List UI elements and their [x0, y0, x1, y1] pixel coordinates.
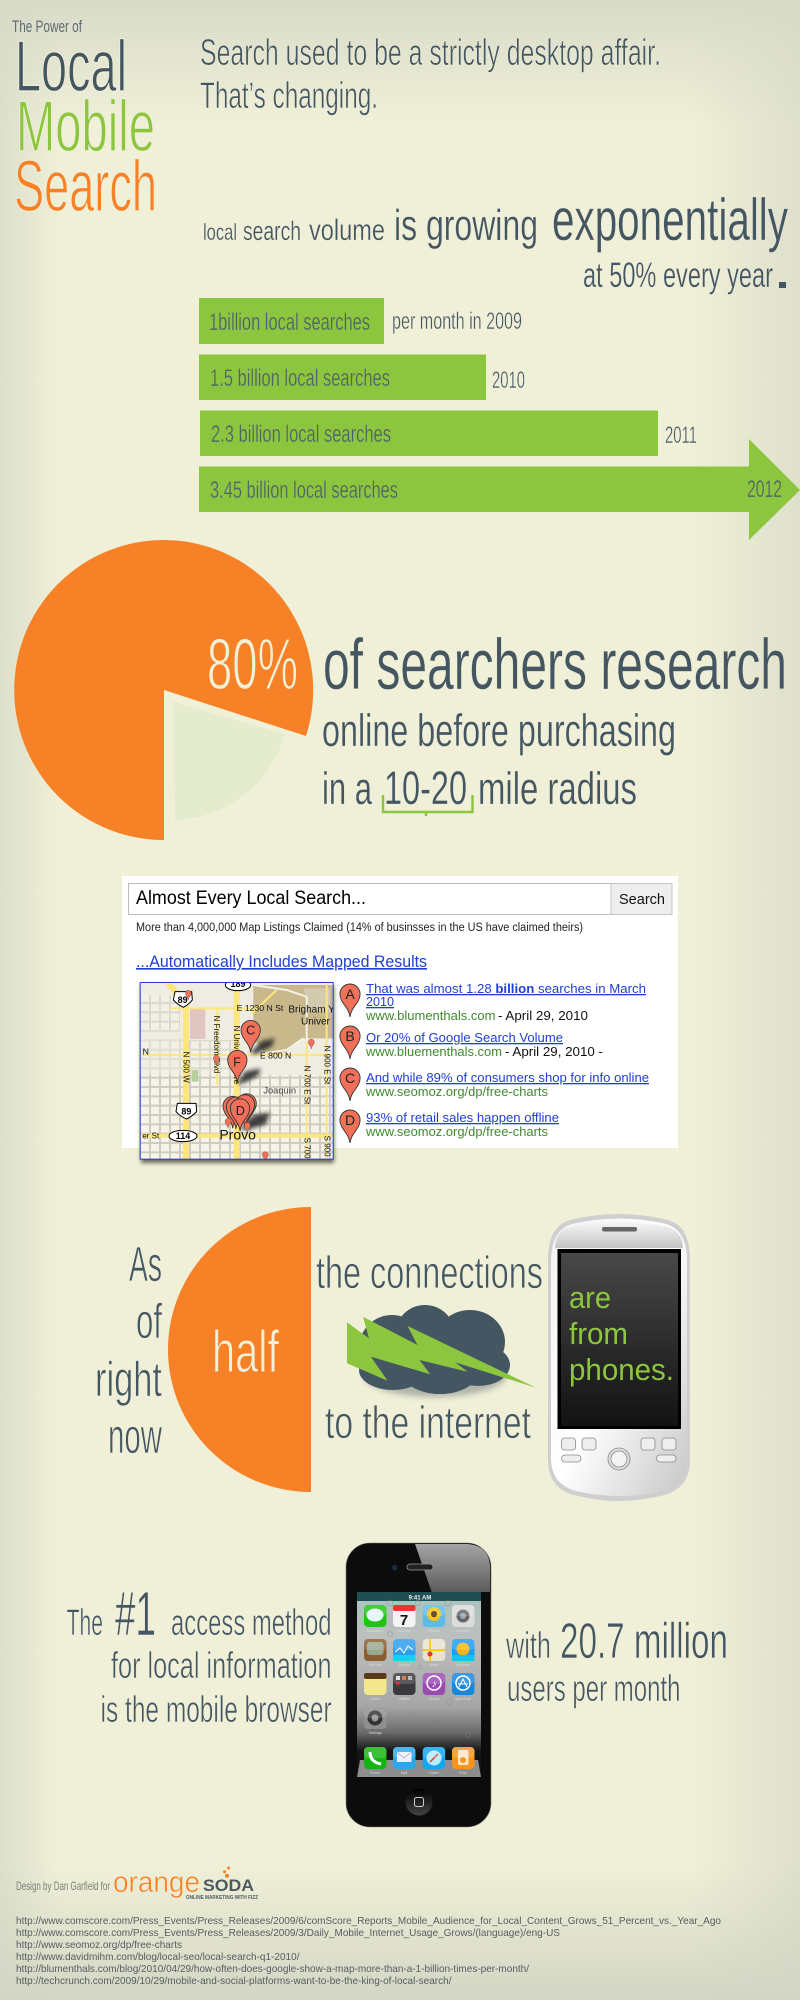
internet text: to the internet [325, 1397, 531, 1448]
arrow bar 2012 [199, 439, 800, 540]
credit and orangesoda logo [16, 1866, 258, 1901]
map road labels: N Freedom Blvd [212, 1016, 221, 1073]
map road labels: S 900 [323, 1136, 332, 1157]
title kicker: The Power of [12, 17, 82, 36]
app labels: Maps [430, 1663, 439, 1667]
result B: - April 29, 2010 - [505, 1044, 603, 1059]
bar 2009 [199, 298, 522, 344]
phone screen [558, 1249, 681, 1429]
half circle chart: half [212, 1319, 279, 1385]
title word: Search: Search [14, 147, 157, 227]
result B: Or 20% of Google Search Volume [366, 1030, 563, 1045]
map road labels: Provo [219, 1126, 256, 1142]
map markers [185, 990, 314, 1162]
source list: http://www.seomoz.org/dp/free-charts [16, 1939, 182, 1951]
phone screen text: phones. [569, 1352, 674, 1387]
map markers: C [246, 1023, 255, 1037]
text: the #1 access method: is the mobile browser [101, 1689, 332, 1730]
map road labels: Joaquin [263, 1085, 296, 1095]
text: 20.7 million users [505, 1613, 728, 1709]
logo [113, 1866, 258, 1901]
search box: Almost Every Local Search... [136, 887, 366, 909]
result D: www.seomoz.org/dp/free-charts [365, 1124, 548, 1139]
app icons: 7 [400, 1612, 408, 1629]
result A [340, 981, 646, 1023]
map road labels: er St [142, 1131, 160, 1140]
home button [406, 1788, 432, 1816]
stacked text: as of right now: As [129, 1238, 162, 1292]
pie label: 80% [207, 625, 298, 705]
growth headline: volume [309, 214, 385, 247]
map markers: D [236, 1104, 245, 1118]
icon: android phone [548, 1214, 690, 1501]
app labels: iPod [459, 1771, 467, 1775]
result A: - April 29, 2010 [498, 1008, 588, 1023]
result C: And while 89% of consumers shop for info online [366, 1070, 649, 1085]
phone buttons [562, 1438, 676, 1470]
app icons [364, 1605, 474, 1769]
map road labels: Univer [301, 1016, 331, 1027]
map road labels [142, 1003, 335, 1159]
arrow bar 2012: 2012 [747, 476, 782, 503]
source list: http://www.comscore.com/Press_Events/Press_Releases/2009/6/comScore_Reports_Mobile_Audience_for_Local_Content_Grows_51_Percent_vs._Year_Ago [16, 1915, 721, 1927]
result C: www.seomoz.org/dp/free-charts [365, 1084, 548, 1099]
map highway shields: 189 [230, 979, 245, 989]
intro text: That’s changing. [200, 75, 378, 116]
source list: http://blumenthals.com/blog/2010/04/29/how-often-does-google-show-a-map-more-than-a-1-billion-times-per-month/ [16, 1963, 529, 1975]
map highway shields: 89 [178, 995, 188, 1005]
app labels: Camera [457, 1629, 469, 1633]
bar chart: local search volume per year [199, 298, 800, 540]
map highway shields: 89 [181, 1106, 191, 1116]
panel: search results [122, 876, 678, 1163]
growth headline: local [203, 219, 237, 245]
lightning bolt [347, 1317, 536, 1388]
app labels: Stocks [399, 1663, 410, 1667]
title: The Power of Local Mobile Search [12, 17, 157, 227]
app labels: YouTube [368, 1663, 382, 1667]
bracket under 10-20 [383, 795, 472, 816]
bar 2011: 2.3 billion local searches [211, 421, 391, 448]
map [140, 979, 335, 1163]
map road labels: N [143, 1046, 149, 1056]
title word: Mobile: Mobile [16, 87, 155, 167]
bar 2009: per month in 2009 [392, 308, 522, 335]
connections text: the connections [316, 1247, 543, 1298]
stacked text: as of right now: now [108, 1410, 162, 1464]
stacked text: as of right now: of [136, 1295, 162, 1349]
app labels: Utilities [398, 1697, 410, 1701]
source list: http://techcrunch.com/2009/10/29/mobile-and-social-platforms-want-to-be-the-king-of-local-search/ [16, 1975, 452, 1987]
bar 2011: 2011 [665, 422, 697, 449]
app icons: ♪ [432, 1679, 436, 1690]
research statement: 10-20 [384, 761, 467, 814]
map road labels: N 700 E St [303, 1066, 312, 1105]
logo: orange [113, 1866, 200, 1899]
cloud shadow [363, 1353, 507, 1397]
result A: That was almost 1.28 billion searches in March [366, 981, 646, 996]
text: 20.7 million users: users per month [507, 1668, 680, 1709]
search box: Search [619, 891, 665, 908]
result A: www.blumenthals.com [365, 1008, 496, 1023]
bar 2010 [199, 354, 525, 400]
map road labels: E 1230 N St [237, 1003, 284, 1013]
app labels: App Store [455, 1697, 471, 1701]
result B [340, 1026, 603, 1059]
cloud [359, 1305, 510, 1394]
growth headline: is growing [394, 201, 538, 250]
map marker shadows [237, 1038, 275, 1130]
app labels: Calendar [397, 1629, 412, 1633]
source list: http://www.davidmihm.com/blog/local-seo/local-search-q1-2010/ [16, 1951, 300, 1963]
text: the #1 access method [67, 1580, 332, 1730]
app labels: Notes [370, 1697, 380, 1701]
text: the #1 access method: for local information [111, 1645, 332, 1686]
stacked text: as of right now: right [95, 1353, 162, 1407]
map road labels: Brigham Y [288, 1005, 335, 1016]
phone screen text: from [569, 1316, 628, 1351]
map road labels: E 800 N [260, 1050, 291, 1060]
map road labels: S 700 [303, 1138, 312, 1159]
app icon gloss [364, 1605, 474, 1758]
pie orange slice [14, 540, 313, 840]
logo: ONLINE MARKETING WITH FIZZ [186, 1895, 258, 1901]
icon: iphone: 9:41 AM [409, 1596, 431, 1602]
bar 2009: 1billion local searches [209, 309, 370, 336]
text: the #1 access method: access method [171, 1602, 332, 1643]
app labels: Photos [428, 1629, 440, 1633]
map road labels: N 500 W [181, 1052, 190, 1083]
source list: http://www.comscore.com/Press_Events/Press_Releases/2009/3/Daily_Mobile_Internet_Usage_Grows/(language)/eng-US [16, 1927, 560, 1939]
result A: 2010 [366, 994, 394, 1009]
mapped results heading: ...Automatically Includes Mapped Results [136, 953, 427, 971]
app labels: Settings [368, 1731, 382, 1735]
result B: www.bluementhals.com [365, 1044, 502, 1059]
result C: C [345, 1070, 355, 1086]
text: the #1 access method: The [67, 1602, 103, 1643]
research statement: in a [322, 763, 373, 814]
growth headline [203, 187, 788, 295]
pie light slice [172, 702, 285, 820]
icon: iphone [346, 1543, 491, 1827]
credit and orangesoda logo: Design by Dan Garfield for [16, 1879, 110, 1893]
result D: D [345, 1112, 355, 1128]
app labels: Mail [401, 1771, 407, 1775]
text: 20.7 million users: with [505, 1625, 551, 1666]
app labels: Weather [456, 1663, 471, 1667]
listing note: More than 4,000,000 Map Listings Claimed (14% of businsses in the US have claimed theirs) [136, 922, 583, 934]
logo: SODA [203, 1876, 254, 1895]
app labels: iTunes [429, 1697, 440, 1701]
arrow bar 2012: 3.45 billion local searches [210, 477, 398, 504]
map road labels: N 900 E St [323, 1046, 332, 1085]
research statement [322, 626, 787, 814]
icon: cloud with lightning [347, 1305, 536, 1397]
map highway shields [169, 979, 251, 1142]
result D: 93% of retail sales happen offline [366, 1110, 559, 1125]
bar 2010: 2010 [492, 367, 525, 394]
intro text [200, 32, 661, 116]
phone glare [415, 1544, 490, 1592]
text: the #1 access method: #1 [115, 1580, 156, 1649]
map road labels: N University Ave [232, 1026, 241, 1085]
result A: A [345, 986, 355, 1002]
source list [16, 1915, 721, 1987]
app labels: Messages [367, 1629, 383, 1633]
app labels [367, 1629, 471, 1775]
phone screen text: are [569, 1280, 611, 1315]
stacked text: as of right now [95, 1238, 162, 1464]
phone screen text [569, 1280, 674, 1387]
search box [128, 884, 672, 914]
bar 2010: 1.5 billion local searches [210, 365, 390, 392]
result D [340, 1110, 559, 1143]
map markers: F [233, 1055, 241, 1069]
app labels: Phone [370, 1771, 380, 1775]
half circle chart [168, 1207, 311, 1492]
result B: B [345, 1028, 355, 1044]
title word: Local: Local [15, 27, 127, 107]
pie chart: 80 percent [14, 540, 313, 840]
research statement: mile radius [478, 763, 637, 814]
bar 2011 [200, 410, 697, 456]
iphone screen [357, 1592, 481, 1777]
growth headline: search [243, 216, 301, 246]
map highway shields: 114 [176, 1131, 190, 1141]
result C [340, 1068, 649, 1101]
app labels: Safari [429, 1771, 439, 1775]
